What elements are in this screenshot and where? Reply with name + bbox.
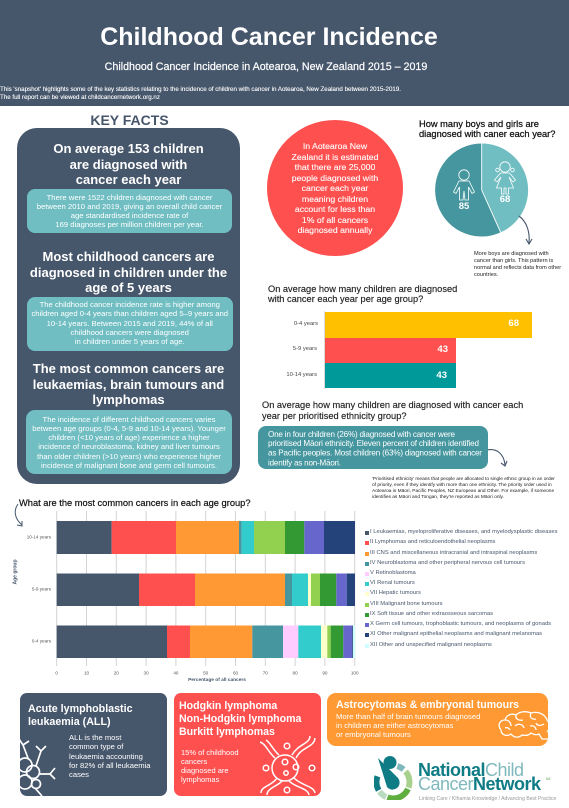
bar: 5-9 years [325,338,456,363]
red circle callout [267,120,403,256]
intro text: This 'snapshot' highlights some of the key statistics relating to the incidence of children with cancer in Aotearoa, New Zealand between 2015-2019. [0,86,401,93]
intro text: The full report can be viewed at childcancernetwork.org.nz [0,94,160,101]
key fact heading 1: On average 153 children [53,141,204,156]
key fact box 2: The childhood cancer incidence rate is higher among [40,300,220,309]
bar: 10-14 years [57,521,355,554]
chart legend: X Germ cell tumours, trophoblastic tumours, and neoplasms of gonads [370,621,551,627]
key fact box 3: between age groups (0-4, 5-9 and 10-14 years). Younger [32,424,226,433]
key fact box 1 [27,189,232,233]
axis labels: 20 [114,670,119,676]
red circle callout: account for less than [295,204,375,214]
ethnicity footnote: 'Prioritised ethnicity' means that people are allocated to single ethnic group in an order [372,477,555,482]
logo wordmark: NationalChild [418,760,524,780]
card: lymphomas [174,693,320,796]
intro text [0,86,401,101]
icon: boy [454,170,474,200]
axis labels: 90 [322,670,328,676]
card title: leukaemia (ALL) [28,716,111,728]
icon: girl [494,162,516,194]
axis labels: 10 [84,670,89,676]
key fact box 2: children aged 0-4 years than children aged 5–9 years and [31,309,228,318]
key fact heading 3: leukaemias, brain tumours and [33,377,224,392]
chart legend: IX Soft tissue and other extraosseous sarcomas [370,611,493,617]
red circle callout: people diagnosed with [292,172,378,182]
logo: National Child Cancer Network [374,756,556,802]
axis labels: 70 [263,670,268,676]
title: Childhood Cancer Incidence [100,23,438,51]
ethnicity footnote: of priority, even if they identify with more than one ethnicity. The priority order used in [372,483,552,488]
key fact heading 2: Most childhood cancers are [43,249,214,264]
key fact heading 3: The most common cancers are [33,361,224,376]
card title: Non-Hodgkin lymphoma [179,713,301,725]
bar: 0-4 years [325,312,532,338]
bar label: 0-4 years: 0-4 years [294,321,318,327]
card text: diagnosed are [181,766,229,775]
red circle callout: In Aotearoa New [303,141,367,151]
key fact box 2 [27,297,232,351]
key fact box 2: 10-14 years. Between 2015 and 2019, 44% of all [47,319,213,328]
chart legend: II Lymphomas and reticuloendothelial neoplasms [370,539,495,545]
axis labels: 60 [233,670,238,676]
key fact heading 1: cancer each year [76,172,181,187]
axis labels: 50 [203,670,209,676]
key fact box 1: between 2010 and 2019, giving an overall child cancer [37,202,222,211]
icon: cell cluster [20,739,56,796]
card text: in children are either astrocytomas [336,721,454,730]
bar: 5-9 years: 43 [437,344,448,355]
card title: Astrocytomas & embryonal tumours [336,698,519,710]
header banner [0,0,569,106]
card title: Hodgkin lymphoma [179,700,277,712]
axis labels: 80 [293,670,298,676]
logo wordmark: CancerNetwork [418,774,541,794]
logo mark [374,756,412,800]
icon: brain [498,711,548,740]
key fact box 1: age standardised incidence rate of [71,211,188,220]
chart legend: I Leukaemias, myeloproliferative diseases, and myelodysplastic diseases [370,529,558,535]
key fact box 3: children (<10 years of age) experience a higher [48,433,210,442]
stacked bar chart: 0-4 years [32,638,52,644]
red circle callout: 1% of all cancers [302,214,368,224]
age group heading [268,284,457,304]
arrow: ethnicity note [487,450,507,466]
boys and girls note: normal and reflects data from other [474,265,561,271]
panel: key facts [17,128,240,484]
boys and girls note: More boys are diagnosed with [474,250,549,256]
key fact box 2: childhood cancers were diagnosed [71,328,189,337]
arrow: boys and girls note [519,216,532,244]
card text [336,712,480,739]
boys and girls note: countries. [474,272,498,278]
chart legend: XI Other malignant epithelial neoplasms and malignant melanomas [370,631,542,637]
card: ALL [20,693,167,796]
card text: common type of [69,742,123,751]
card text: for 82% of all leukaemia [69,761,151,770]
bar: 0-4 years: 68 [508,318,519,329]
chart legend: VIII Malignant bone tumours [370,601,443,607]
chart legend: VII Hepatic tumours [370,590,421,596]
bar label: 5-9 years: 5-9 years [293,346,317,352]
key fact box 3: The incidence of different childhood cancers varies [43,414,215,424]
card text: lymphomas [181,775,219,784]
card title: Acute lymphoblastic [28,702,133,714]
ethnicity callout: as Pacific peoples. Most children (63%) diagnosed with cancer [268,448,482,458]
axis labels: 0 [55,670,58,676]
ethnicity callout: prioritised Māori ethnicity. Eleven percent of children identified [268,439,479,448]
stacked chart heading: What are the most common cancers in each age group? [19,498,251,508]
stacked bar chart: 5-9 years [32,586,52,592]
red circle callout: meaning children [302,194,368,204]
bar label: 10-14 years: 10-14 years [286,372,317,378]
arrow: chart heading [15,504,22,526]
bar chart: age group [286,311,532,389]
key fact heading 1: are diagnosed with [70,157,187,172]
card text: cancers [181,757,207,766]
chart legend [365,529,558,648]
age group heading: On average how many children are diagnosed [268,284,457,294]
subtitle: Childhood Cancer Incidence in Aotearoa, New Zealand 2015 – 2019 [105,60,427,72]
key fact box 3 [26,410,232,474]
key fact heading 2 [30,249,227,295]
card text [181,748,239,784]
boys and girls note [474,250,561,278]
card text: 15% of childhood [181,748,239,756]
key fact heading 2: age of 5 years [85,280,172,295]
boys and girls heading: diagnosed with caner each year? [419,129,555,139]
key fact box 3: than older children (>10 years) who experience higher [37,452,221,461]
logo tagline: Linking Care / Kīhamia Knowledge / Advancing Best Practice [419,796,556,802]
card text: leukaemia accounting [69,752,143,761]
bar: 5-9 years [57,574,355,606]
card text: or embryonal tumours [336,730,411,739]
chart legend: VI Renal tumours [370,580,415,586]
red circle callout: that there are 25,000 [295,162,375,172]
stacked bar chart: Age group [12,560,18,584]
ethnicity footnote [372,476,555,500]
key fact heading 3 [32,361,224,407]
ethnicity heading [262,400,523,422]
bar: 10-14 years [325,363,456,388]
ethnicity footnote: identifies as Māori and Tongan, they're reported as Māori only. [372,495,504,500]
boys and girls heading: How many boys and girls are [419,118,539,128]
key fact box 1: There were 1522 children diagnosed with cancer [47,192,212,202]
boys and girls note: cancer than girls. This pattern is [474,258,553,264]
age group heading: with cancer each year per age group? [268,294,423,304]
logo wordmark [418,760,541,794]
chart legend: XII Other and unspecified malignant neoplasms [370,642,492,648]
red circle callout: diagnosed annually [298,225,372,235]
ethnicity heading: year per prioritised ethnicity group? [262,411,406,421]
key fact box 3: incidence of neuroblastoma, kidney and liver tumours [38,442,220,451]
red circle callout: Zealand it is estimated [292,152,378,162]
key facts heading: KEY FACTS [90,112,169,128]
key fact box 2: in children under 5 years of age. [75,337,185,346]
ethnicity footnote: Aotearoa is Māori, Pacific Peoples, NZ European and Other. For example, if someone [372,489,554,494]
key fact box 3: incidence of malignant bone and germ cell tumours. [41,461,217,470]
key fact heading 1 [53,141,204,187]
card text: More than half of brain tumours diagnosed [336,712,480,720]
red circle callout: cancer each year [302,183,368,193]
chart legend: IV Neuroblastoma and other peripheral nervous cell tumours [370,560,525,566]
pie value: girls: 68 [500,194,510,205]
axis labels [55,670,359,683]
card title [28,702,133,728]
key fact box 1: 169 diagnoses per million children per year. [55,220,204,229]
stacked bar chart: 10-14 years [27,534,52,540]
axis labels: Percentage of all cancers [188,677,246,683]
key fact heading 3: lymphomas [92,392,165,407]
boys and girls heading [419,118,556,140]
ethnicity heading: On average how many children are diagnosed with cancer each [262,400,523,410]
axis labels: 100 [351,670,359,676]
pie value: boys: 85 [459,201,469,212]
card text: ALL is the most [69,733,121,742]
bar: 10-14 years: 43 [436,370,447,381]
card title [179,700,302,738]
logo NZ mark: NZ [546,777,551,781]
ethnicity callout [258,426,488,469]
axis labels: 30 [144,670,149,676]
card text: cases [69,770,89,779]
bar: 0-4 years [57,626,355,658]
chart legend: V Retinoblastoma [370,570,416,576]
card title: Burkitt lymphomas [179,726,275,738]
card text [69,733,151,779]
card: brain tumours [327,693,548,746]
ethnicity callout: One in four children (26%) diagnosed with cancer were [268,430,455,439]
key fact heading 2: diagnosed in children under the [30,265,227,280]
chart legend: III CNS and miscellaneous intracranial and intraspinal neoplasms [370,550,537,556]
ethnicity callout: identify as non-Māori. [268,458,341,467]
icon: lymph cell [260,736,316,796]
axis labels: 40 [173,670,179,676]
